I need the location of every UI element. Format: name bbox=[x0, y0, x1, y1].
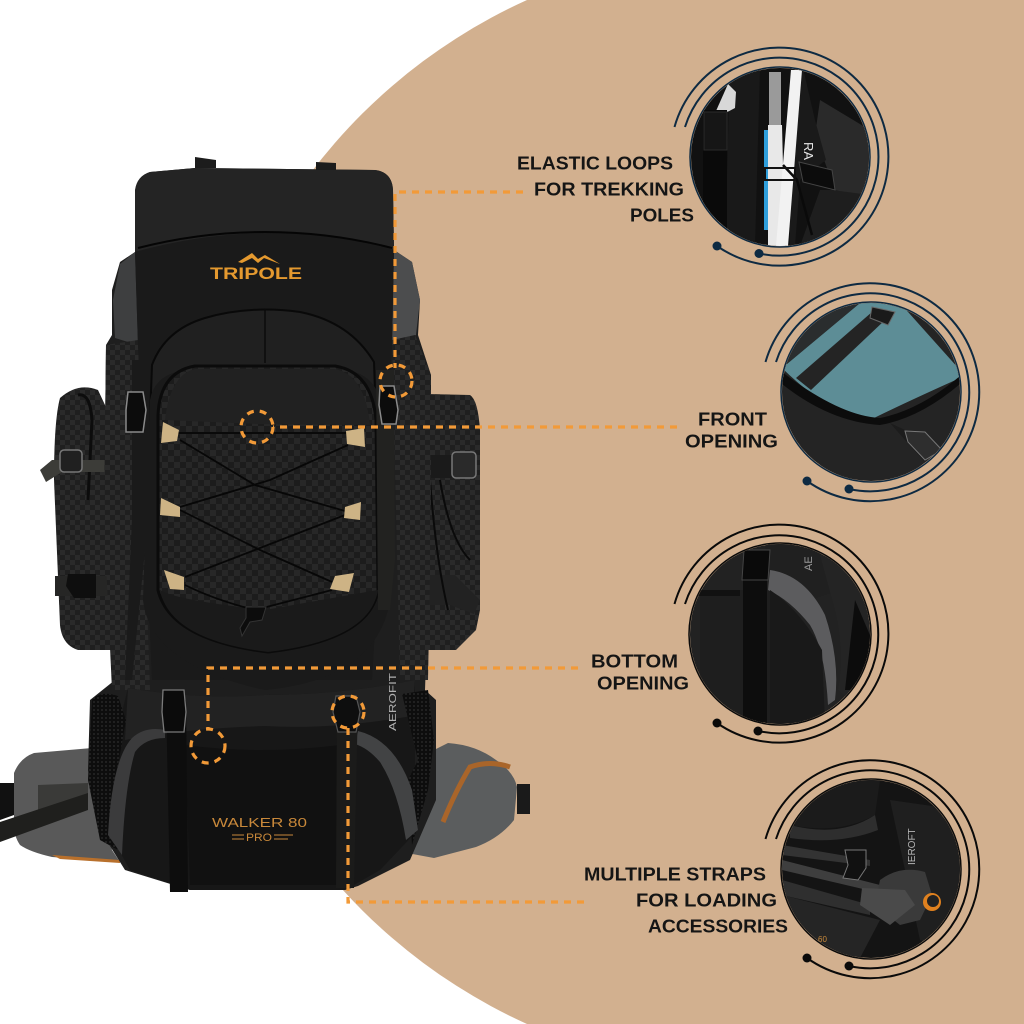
callout: bottom opening line bbox=[208, 668, 578, 730]
ring dots bbox=[802, 954, 854, 970]
photo: trekking poles bbox=[690, 68, 870, 246]
model label: PRO bbox=[246, 832, 272, 844]
upper front pocket bbox=[150, 310, 376, 420]
front pocket with weave bbox=[158, 366, 378, 652]
callout: trekking poles marker bbox=[380, 365, 412, 397]
label: elastic loops: FOR TREKKING bbox=[534, 180, 684, 200]
buckle lower left bbox=[162, 690, 186, 732]
tan tabs bbox=[160, 422, 365, 592]
top straps bbox=[195, 157, 336, 170]
hip belt left bbox=[0, 748, 120, 863]
left side pocket bbox=[40, 387, 112, 650]
rings: bottom opening bbox=[674, 525, 888, 743]
side compression strap right bbox=[376, 370, 395, 610]
detail: bottom opening bbox=[674, 525, 888, 743]
left mesh pocket bbox=[88, 694, 126, 850]
rings: trekking poles bbox=[674, 48, 888, 266]
label: bottom opening: BOTTOM bbox=[591, 652, 678, 672]
upper body bbox=[135, 233, 394, 680]
label: elastic loops bbox=[517, 154, 694, 226]
callout: straps line bbox=[348, 728, 590, 902]
label: front opening bbox=[685, 410, 778, 452]
label: multiple straps bbox=[584, 864, 788, 936]
label: front opening: FRONT bbox=[698, 410, 767, 430]
top lid bbox=[135, 168, 394, 252]
callout: straps marker bbox=[332, 696, 364, 728]
buckle lower right bbox=[333, 696, 360, 732]
lower bag section bbox=[108, 680, 418, 890]
photo: multiple straps: IEROFT bbox=[907, 828, 918, 865]
lower left strap bbox=[166, 700, 188, 892]
detail: trekking poles bbox=[674, 48, 888, 266]
label: bottom opening: OPENING bbox=[597, 674, 689, 694]
label: multiple straps: MULTIPLE STRAPS bbox=[584, 864, 766, 884]
main body silhouette bbox=[88, 168, 436, 890]
pocket flap bbox=[165, 369, 370, 425]
elastic cords bbox=[178, 433, 348, 610]
photo: trekking poles: RA bbox=[801, 142, 816, 160]
gray trim arc left bbox=[108, 729, 165, 855]
detail: multiple straps bbox=[766, 760, 979, 978]
photo: front opening bbox=[782, 303, 960, 481]
buckle left bbox=[126, 392, 146, 432]
label: multiple straps: FOR LOADING bbox=[636, 890, 777, 910]
logo: Tripole bbox=[210, 253, 302, 283]
lower pocket shading bbox=[160, 590, 378, 652]
zipper pull bbox=[240, 607, 266, 636]
right side panel bbox=[392, 335, 431, 680]
buckle right bbox=[379, 386, 398, 424]
label: front opening: OPENING bbox=[685, 432, 778, 452]
outer curved pocket band bbox=[143, 370, 388, 690]
label: elastic loops: POLES bbox=[630, 206, 694, 226]
gray right gusset bbox=[392, 250, 420, 345]
label: multiple straps: ACCESSORIES bbox=[648, 916, 788, 936]
right mesh pocket bbox=[402, 690, 434, 845]
AEROFIT label: AEROFIT bbox=[387, 672, 399, 731]
ring dots bbox=[712, 718, 762, 736]
right side pocket bbox=[418, 394, 480, 650]
photo: multiple straps: 60 bbox=[818, 935, 827, 944]
rings: multiple straps bbox=[766, 760, 979, 978]
label: bottom opening bbox=[591, 652, 689, 694]
model label: WALKER 80 bbox=[212, 815, 307, 830]
callout: trekking poles line bbox=[395, 192, 523, 368]
backpack bbox=[0, 157, 530, 892]
side compression strap left bbox=[125, 360, 150, 680]
photo: multiple straps bbox=[782, 780, 960, 958]
callout: bottom opening marker bbox=[191, 729, 225, 763]
label: elastic loops: ELASTIC LOOPS bbox=[517, 154, 673, 174]
central bottom panel bbox=[185, 745, 340, 885]
hip belt right bbox=[407, 743, 530, 858]
callout: front opening line bbox=[273, 425, 677, 429]
upper lower band bbox=[125, 680, 415, 740]
photo: bottom opening: AE bbox=[803, 556, 815, 571]
callout lines bbox=[191, 192, 677, 902]
detail: front opening bbox=[766, 283, 979, 501]
callout: front opening marker bbox=[241, 411, 273, 443]
gray left gusset bbox=[113, 252, 138, 345]
left side panel bbox=[104, 340, 150, 690]
rings: front opening bbox=[766, 283, 979, 501]
logo: Tripole: TRIPOLE bbox=[210, 264, 302, 283]
gray trim arc right bbox=[355, 731, 418, 840]
model label bbox=[212, 815, 307, 844]
lower right strap bbox=[336, 700, 358, 888]
ring dots bbox=[712, 242, 764, 258]
ring dots bbox=[802, 476, 854, 494]
photo: bottom opening bbox=[690, 544, 875, 724]
